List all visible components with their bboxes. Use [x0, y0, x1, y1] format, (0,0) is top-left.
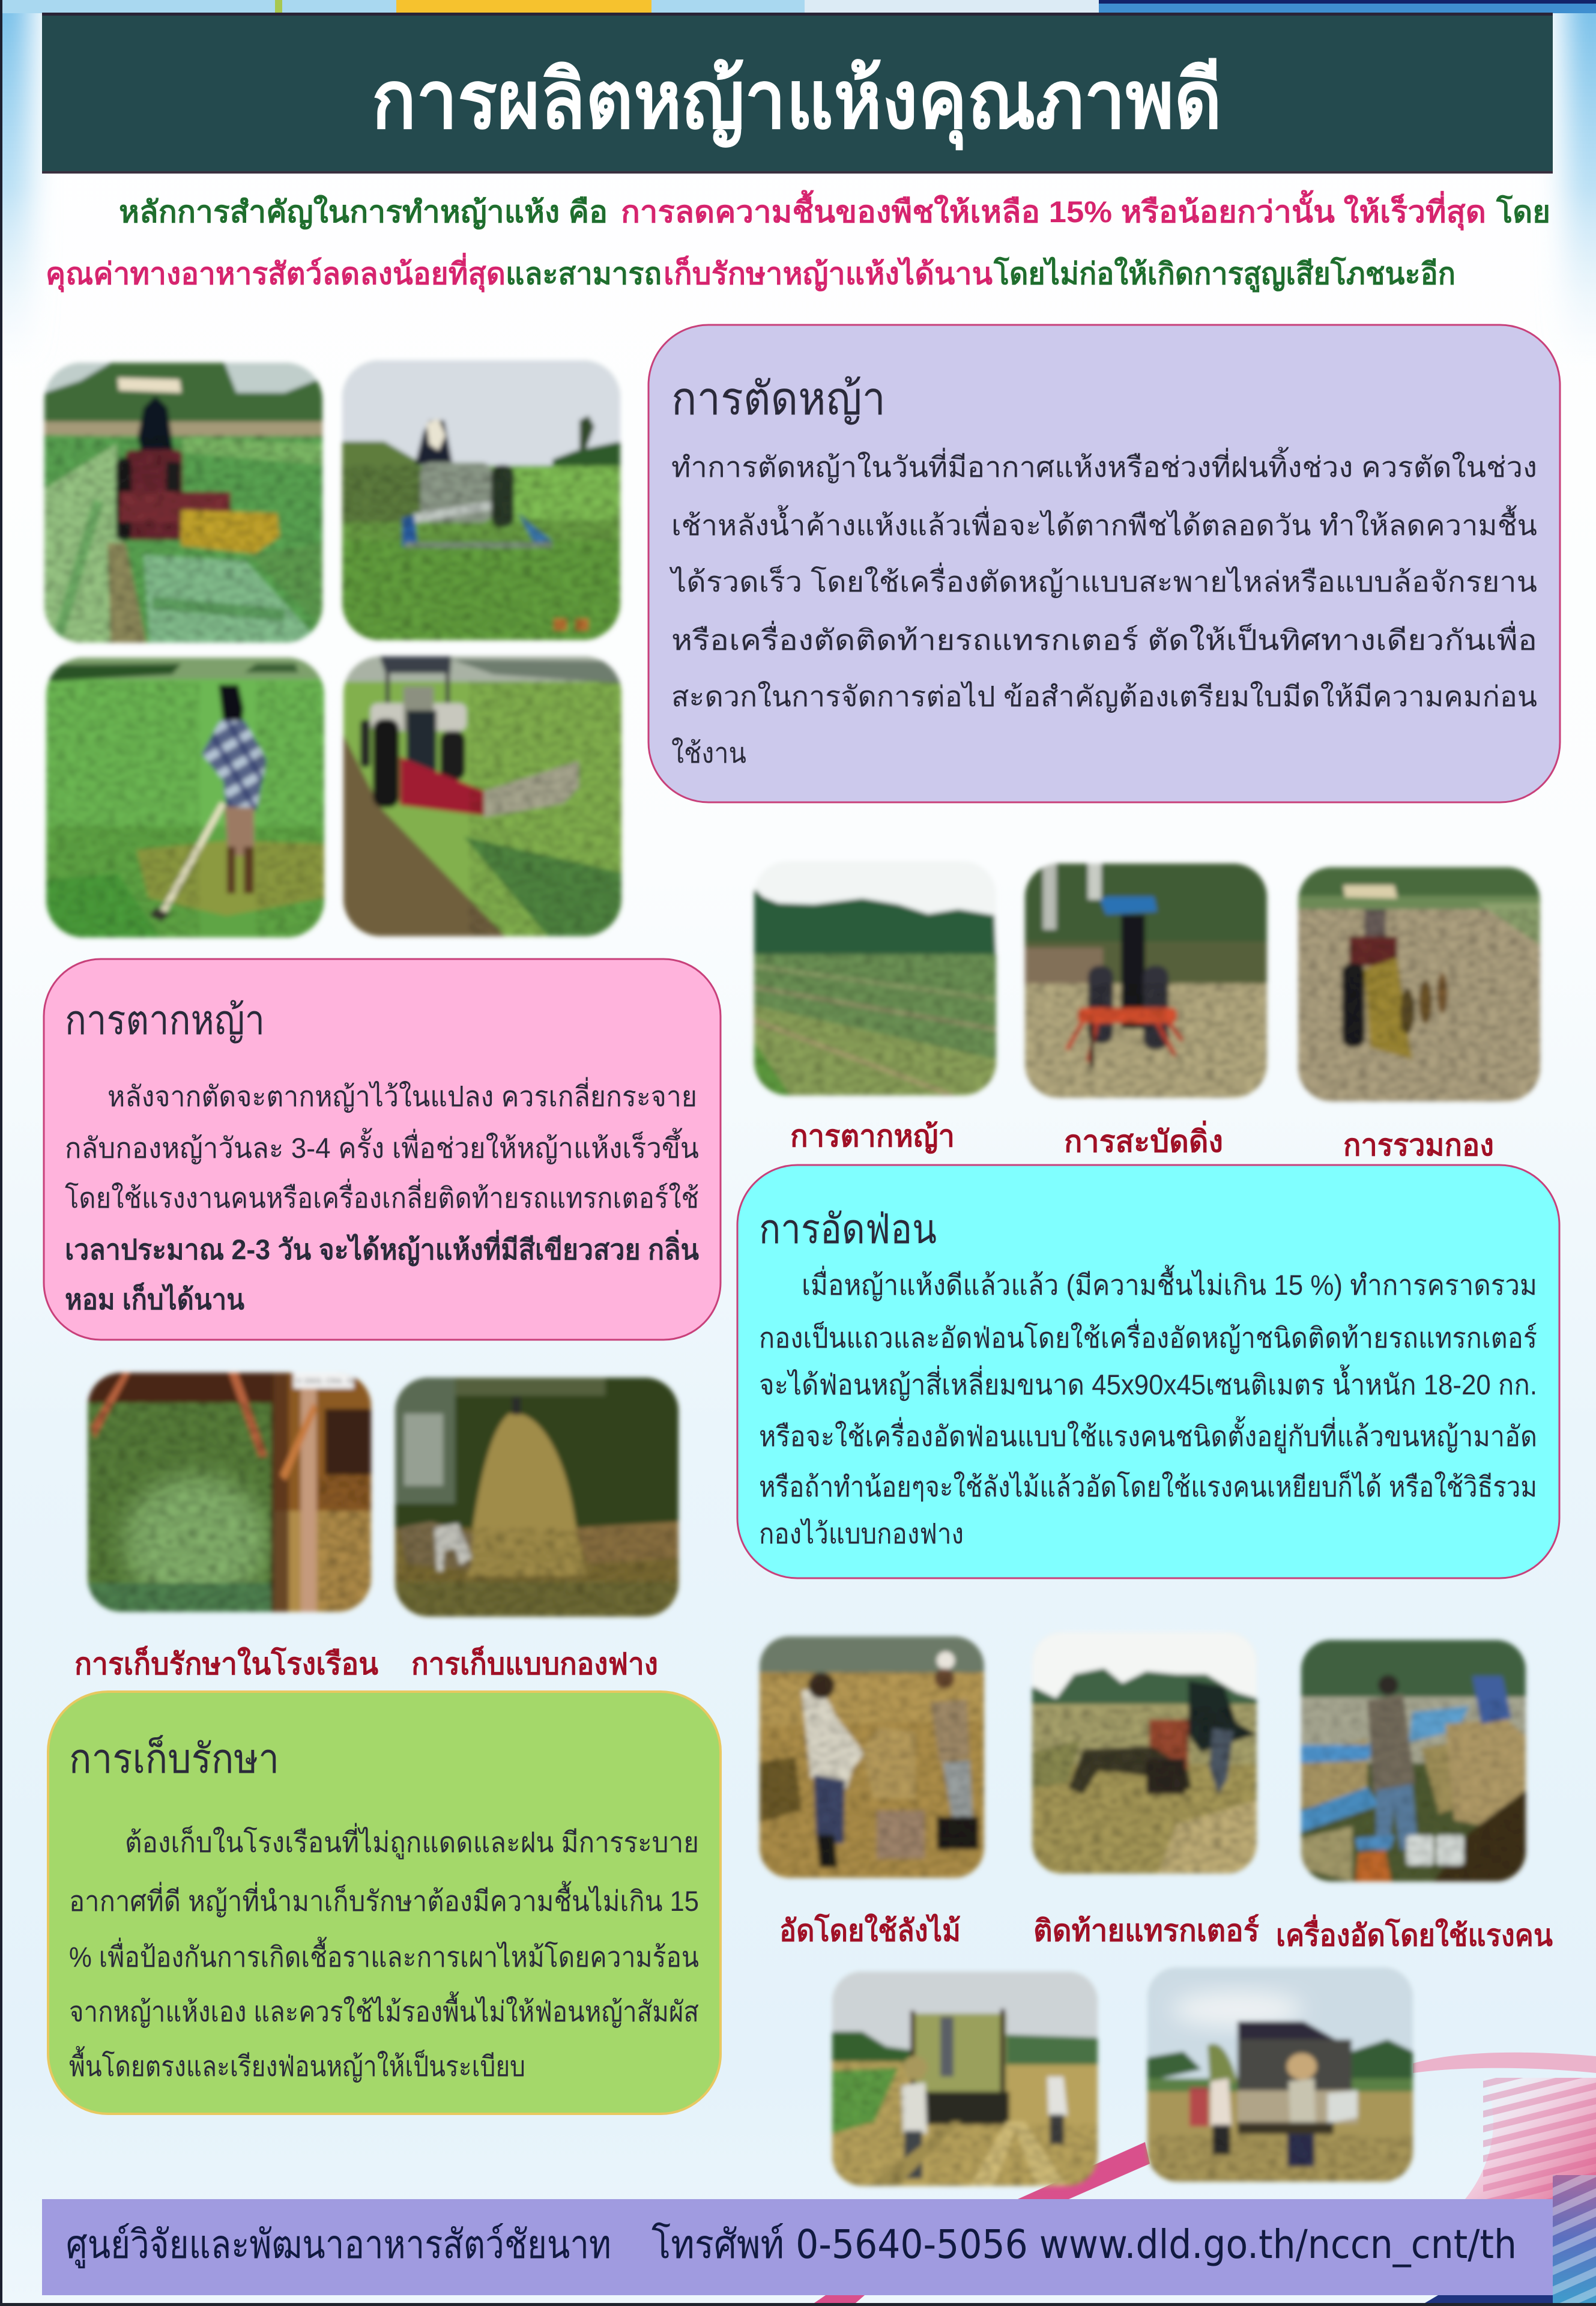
body text: storage: ต้องเก็บในโรงเรือนที่ไม่ถูกแดดและฝน มีการระบาย [125, 1823, 699, 1860]
body text: baling: หรือจะใช้เครื่องอัดฟ่อนแบบใช้แรงคนชนิดตั้งอยู่กับที่แล้วขนหญ้ามาอัด [759, 1416, 1537, 1454]
panel: storage [48, 1692, 721, 2114]
photo: tractor-mounted baler [1032, 1632, 1257, 1874]
heading: storage: การเก็บรักษา [69, 1735, 279, 1782]
heading: mowing: การตัดหญ้า [671, 374, 886, 425]
panel: mowing [648, 325, 1560, 802]
caption: windrowing: การรวมกอง [1343, 1128, 1494, 1162]
body text: drying: กลับกองหญ้าวันละ 3-4 ครั้ง เพื่อช่วยให้หญ้าแห้งเร็วขึ้น [65, 1128, 699, 1164]
photo: bales stacked in barn [88, 1373, 371, 1612]
footer bar [42, 2199, 1553, 2295]
body text: drying [65, 1077, 699, 1315]
photo: person with brush cutter [46, 658, 324, 937]
intro paragraph: คุณค่าทางอาหารสัตว์ลดลงน้อยที่สุด [46, 253, 506, 292]
body text: storage: พื้นโดยตรงและเรียงฟ่อนหญ้าให้เป็นระเบียบ [69, 2046, 525, 2083]
caption: barn storage: การเก็บรักษาในโรงเรือน [74, 1645, 378, 1681]
photo: haystack with cow [395, 1378, 679, 1617]
caption: manual baling machine: เครื่องอัดโดยใช้แรงคน [1276, 1914, 1553, 1952]
body text: mowing: หรือเครื่องตัดติดท้ายรถแทรกเตอร์ ตัดให้เป็นทิศทางเดียวกันเพื่อ [671, 620, 1537, 656]
body text: mowing: เช้าหลังน้ำค้างแห้งแล้วเพื่อจะได้ตากพืชได้ตลอดวัน ทำให้ลดความชื้น [671, 505, 1537, 541]
body text: storage: อากาศที่ดี หญ้าที่นำมาเก็บรักษาต้องมีความชื้นไม่เกิน 15 [69, 1881, 699, 1917]
intro paragraph: หลักการสำคัญในการทำหญ้าแห้ง คือ [119, 195, 608, 229]
body text: drying: โดยใช้แรงงานคนหรือเครื่องเกลี่ยติดท้ายรถแทรกเตอร์ใช้ [65, 1178, 699, 1214]
intro paragraph: โดย [1496, 194, 1550, 229]
photo: two men with wooden baling box [760, 1636, 984, 1878]
photo: manual baling machine [1301, 1640, 1526, 1881]
photo: tractor rake [1298, 867, 1540, 1101]
heading: drying: การตากหญ้า [65, 997, 265, 1043]
body text: mowing [669, 447, 1537, 769]
photo: walking mower operator [342, 360, 620, 640]
body text: baling [759, 1265, 1537, 1549]
body text: drying: หลังจากตัดจะตากหญ้าไว้ในแปลง ควรเกลี่ยกระจาย [107, 1077, 697, 1113]
body text: drying: หอม เก็บได้นาน [65, 1282, 244, 1315]
caption: wooden box baling: อัดโดยใช้ลังไม้ [779, 1913, 961, 1947]
body text: mowing: ทำการตัดหญ้าในวันที่มีอากาศแห้งหรือช่วงที่ฝนทิ้งช่วง ควรตัดในช่วง [671, 447, 1537, 483]
body text: storage: % เพื่อป้องกันการเกิดเชื้อราและการเผาไหม้โดยความร้อน [69, 1937, 699, 1973]
heading: baling: การอัดฟ่อน [759, 1206, 937, 1252]
title: การผลิตหญ้าแห้งคุณภาพดี [372, 55, 1222, 151]
panel: baling [737, 1165, 1559, 1578]
body text: baling: จะได้ฟ่อนหญ้าสี่เหลี่ยมขนาด 45x90x45เซนติเมตร น้ำหนัก 18-20 กก. [759, 1364, 1537, 1401]
body text: drying: เวลาประมาณ 2-3 วัน จะได้หญ้าแห้งที่มีสีเขียวสวย กลิ่น [65, 1229, 699, 1266]
photo: drying hay field [754, 861, 996, 1095]
body text: baling: กองไว้แบบกองฟาง [759, 1518, 964, 1549]
caption: tedding: การสะบัดดิ่ง [1064, 1121, 1223, 1158]
body text: baling: กองเป็นแถวและอัดฟ่อนโดยใช้เครื่องอัดหญ้าชนิดติดท้ายรถแทรกเตอร์ [759, 1318, 1537, 1354]
photo: tractor mower with yellow deck [44, 363, 322, 643]
footer: phone and website: โทรศัพท์ 0-5640-5056 www.dld.go.th/nccn_cnt/th [651, 2221, 1517, 2268]
caption: drying: การตากหญ้า [790, 1119, 955, 1154]
body text: mowing: ได้รวดเร็ว โดยใช้เครื่องตัดหญ้าแบบสะพายไหล่หรือแบบล้อจักรยาน [669, 562, 1537, 598]
intro paragraph: และสามารถ [506, 257, 662, 291]
photo: pickup truck with bales [1147, 1967, 1413, 2182]
footer: research center name: ศูนย์วิจัยและพัฒนาอาหารสัตว์ชัยนาท [66, 2222, 611, 2269]
intro paragraph [46, 190, 1550, 292]
intro paragraph: โดยไม่ก่อให้เกิดการสูญเสียโภชนะอีก [993, 256, 1455, 292]
photo: loading bales onto truck [832, 1972, 1098, 2186]
body text: mowing: สะดวกในการจัดการต่อไป ข้อสำคัญต้องเตรียมใบมีดให้มีความคมก่อน [671, 680, 1537, 713]
body text: storage [69, 1823, 699, 2083]
photo: tractor tedder [1025, 864, 1267, 1098]
intro paragraph: การลดความชื้นของพืชให้เหลือ 15% หรือน้อยกว่านั้น ให้เร็วที่สุด [621, 190, 1486, 231]
caption: tractor-mounted baling: ติดท้ายแทรกเตอร์ [1033, 1914, 1259, 1947]
photo watermark: © 2003, CRA. SI. [296, 1376, 356, 1385]
panel: drying [44, 959, 721, 1340]
caption: haystack storage: การเก็บแบบกองฟาง [411, 1645, 658, 1681]
intro paragraph: เก็บรักษาหญ้าแห้งได้นาน [663, 255, 993, 291]
title banner [42, 13, 1553, 174]
body text: baling: เมื่อหญ้าแห้งดีแล้วแล้ว (มีความชื้นไม่เกิน 15 %) ทำการคราดรวม [802, 1265, 1537, 1301]
body text: mowing: ใช้งาน [671, 737, 746, 769]
photo: tractor with red mower [343, 656, 621, 936]
body text: storage: จากหญ้าแห้งเอง และควรใช้ไม้รองพื้นไม่ให้ฟ่อนหญ้าสัมผัส [69, 1991, 699, 2028]
